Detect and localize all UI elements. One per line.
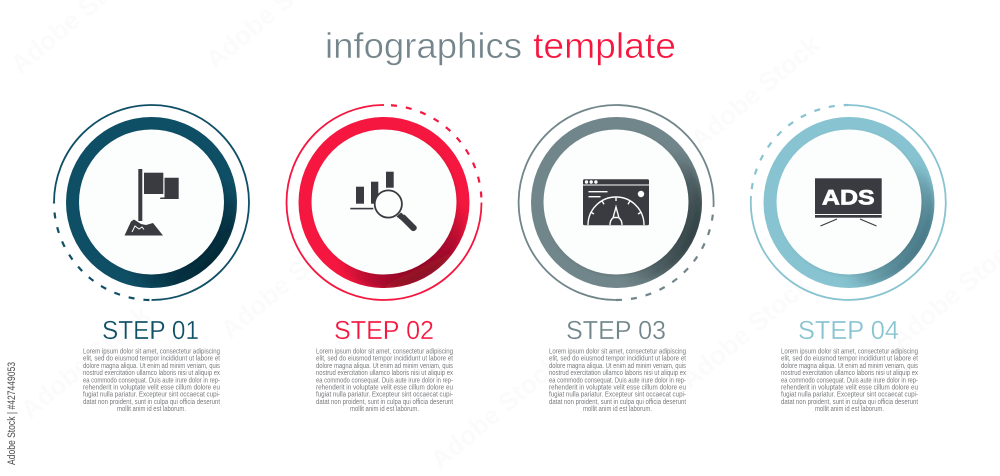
body text: step 02: fugiat nulla pariatur. Excepteur sint occaecat cupi- (316, 392, 454, 399)
watermark: faint stock text: Adobe Stock (685, 29, 826, 155)
body text: step 02: dolore magna aliqua. Ut enim ad minim veniam, quis (316, 363, 453, 370)
body text: step 01 (83, 348, 221, 413)
main disc: step 03 (531, 117, 705, 288)
panel: step 02 (287, 105, 482, 413)
watermark: faint stock text: Adobe Stock (675, 269, 816, 395)
main disc: step 01 (66, 117, 237, 288)
body text: step 04: datat non proident, sunt in culpa qui officia deserunt (781, 399, 918, 406)
body text: step 02: Lorem ipsum dolor sit amet, consectetur adipiscing (316, 348, 453, 356)
body text: step 01: Lorem ipsum dolor sit amet, consectetur adipiscing (83, 348, 220, 356)
body text: step 03: mollit anim id est laborum. (583, 406, 652, 413)
body text: step 02: elit, sed do eiusmod tempor incididunt ut labore et (316, 356, 453, 363)
body text: step 01: dolore magna aliqua. Ut enim ad minim veniam, quis (83, 363, 220, 370)
body text: step 03: dolore magna aliqua. Ut enim ad minim veniam, quis (549, 363, 686, 370)
body text: step 04 (781, 348, 919, 413)
watermark: faint stock text: Adobe Stock (215, 219, 356, 345)
body text: step 04: nostrud exercitation ullamco laboris nisi ut aliquip ex (781, 370, 918, 377)
outer ring: step 04 (751, 105, 946, 300)
outer ring: step 03 (519, 105, 714, 300)
watermark: faint stock text: Adobe Stock (15, 299, 156, 425)
body text: step 04: elit, sed do eiusmod tempor incididunt ut labore et (781, 356, 918, 363)
panel: step 01 (54, 105, 249, 413)
body text: step 02: ea commodo consequat. Duis aute irure dolor in rep- (316, 377, 454, 384)
body text: step 02 (316, 348, 454, 413)
body text: step 01: ea commodo consequat. Duis aute irure dolor in rep- (83, 377, 221, 384)
title: infographics (325, 25, 522, 66)
body text: step 01: mollit anim id est laborum. (117, 406, 186, 413)
body text: step 01: elit, sed do eiusmod tempor incididunt ut labore et (83, 356, 220, 363)
body text: step 04: ea commodo consequat. Duis aute irure dolor in rep- (781, 377, 919, 384)
outer ring: step 02 (287, 105, 482, 300)
body text: step 01: fugiat nulla pariatur. Excepteur sint occaecat cupi- (83, 392, 221, 399)
icon: flag on mountain (124, 169, 179, 236)
icon: browser speedometer (583, 179, 649, 225)
body text: step 02: nostrud exercitation ullamco laboris nisi ut aliquip ex (316, 370, 453, 377)
watermark: faint stock text: Adobe Stock (425, 349, 566, 475)
body text: step 03: ea commodo consequat. Duis aute irure dolor in rep- (549, 377, 687, 384)
main disc: step 04 (764, 117, 936, 288)
body text: step 03: fugiat nulla pariatur. Excepteur sint occaecat cupi- (549, 392, 687, 399)
body text: step 03: nostrud exercitation ullamco laboris nisi ut aliquip ex (549, 370, 686, 377)
title: template (533, 25, 676, 66)
body text: step 03 (549, 348, 687, 413)
body text: step 01: rehenderit in voluptate velit esse cillum dolore eu (83, 384, 220, 392)
body text: step 03: elit, sed do eiusmod tempor incididunt ut labore et (549, 356, 686, 363)
icon: ADS television (815, 178, 882, 226)
body text: step 04: mollit anim id est laborum. (815, 406, 884, 413)
step label: step 02: STEP 02 (334, 315, 434, 345)
outer ring: step 01 (54, 105, 249, 300)
body text: step 04: rehenderit in voluptate velit esse cillum dolore eu (781, 384, 918, 392)
body text: step 04: Lorem ipsum dolor sit amet, consectetur adipiscing (781, 348, 918, 356)
body text: step 04: dolore magna aliqua. Ut enim ad minim veniam, quis (781, 363, 918, 370)
step label: step 01: STEP 01 (102, 315, 199, 345)
step label: step 04: STEP 04 (798, 315, 899, 345)
body text: step 01: datat non proident, sunt in culpa qui officia deserunt (83, 399, 220, 406)
icon: ADS television: ADS (822, 186, 875, 210)
body text: step 02: mollit anim id est laborum. (350, 406, 419, 413)
step label: step 03: STEP 03 (566, 315, 666, 345)
panel: step 03 (519, 105, 714, 413)
body text: step 02: datat non proident, sunt in culpa qui officia deserunt (316, 399, 453, 406)
body text: step 03: datat non proident, sunt in culpa qui officia deserunt (549, 399, 686, 406)
body text: step 03: rehenderit in voluptate velit esse cillum dolore eu (549, 384, 686, 392)
title (325, 25, 676, 66)
panel: step 04 (751, 105, 946, 413)
stock id caption: Adobe Stock | #427449053 (6, 362, 18, 465)
body text: step 01: nostrud exercitation ullamco laboris nisi ut aliquip ex (83, 370, 220, 377)
icon: chart with magnifier (350, 172, 417, 231)
main disc: step 02 (298, 117, 470, 290)
body text: step 03: Lorem ipsum dolor sit amet, consectetur adipiscing (549, 348, 686, 356)
body text: step 02: rehenderit in voluptate velit esse cillum dolore eu (316, 384, 453, 392)
body text: step 04: fugiat nulla pariatur. Excepteur sint occaecat cupi- (781, 392, 919, 399)
